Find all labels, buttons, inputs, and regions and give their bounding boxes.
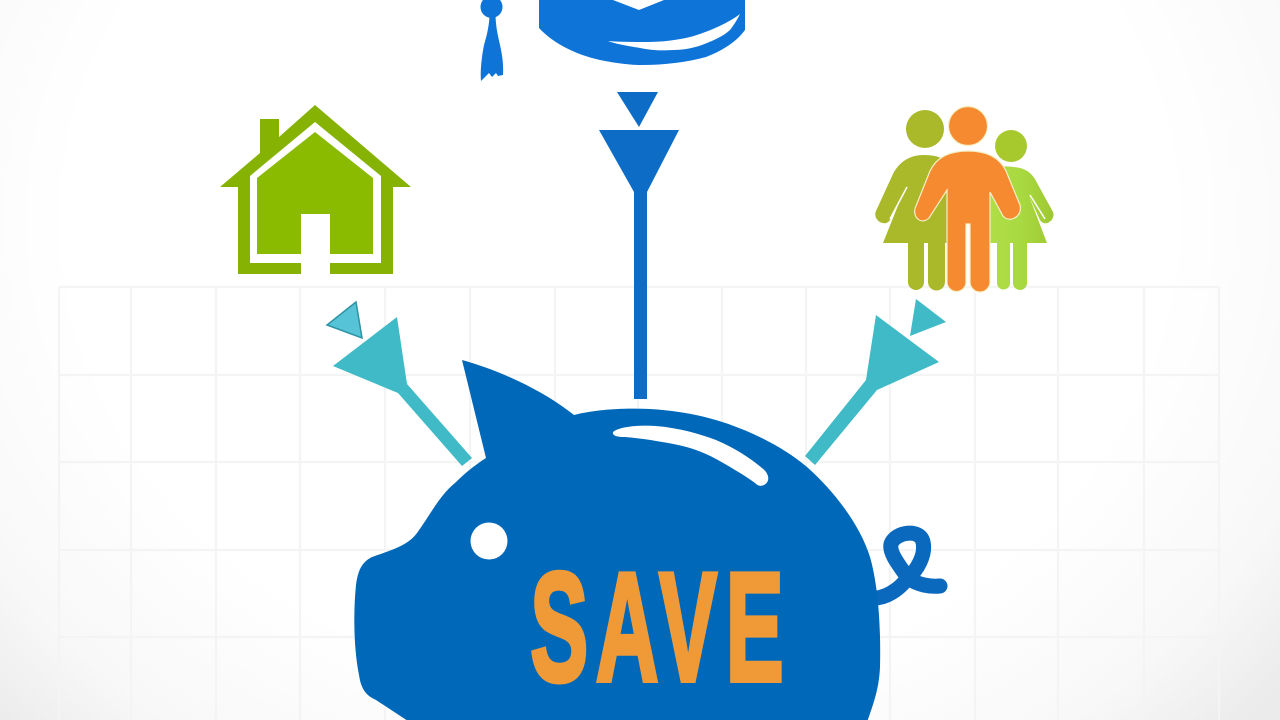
icon: graduation cap [480, 0, 745, 81]
label: SAVE: SAVE [530, 540, 784, 714]
icon: house [220, 105, 411, 274]
falling triangle [910, 299, 946, 336]
right woman [975, 130, 1054, 290]
funnel [333, 317, 472, 466]
pig eye [470, 522, 508, 560]
tassel knob [480, 0, 502, 18]
left woman [875, 110, 965, 290]
background grid [58, 287, 1219, 720]
arrow: centre funnel [599, 92, 679, 399]
pig back highlight [613, 426, 768, 486]
man [915, 106, 1020, 292]
arrow: left funnel [327, 302, 472, 466]
house inner wall [257, 132, 373, 254]
icon: piggy bank [354, 360, 940, 720]
pig body [354, 360, 880, 720]
cap band [539, 0, 745, 65]
icon: family [875, 106, 1054, 292]
tassel [481, 16, 503, 81]
arrow: right funnel [805, 299, 946, 465]
cap chevron [613, 0, 664, 10]
falling triangle [617, 92, 658, 127]
cap highlight [608, 14, 740, 50]
funnel [599, 130, 679, 399]
funnel [805, 315, 939, 465]
falling triangle [327, 302, 362, 338]
pig tail [877, 533, 940, 598]
house outline [220, 105, 411, 274]
